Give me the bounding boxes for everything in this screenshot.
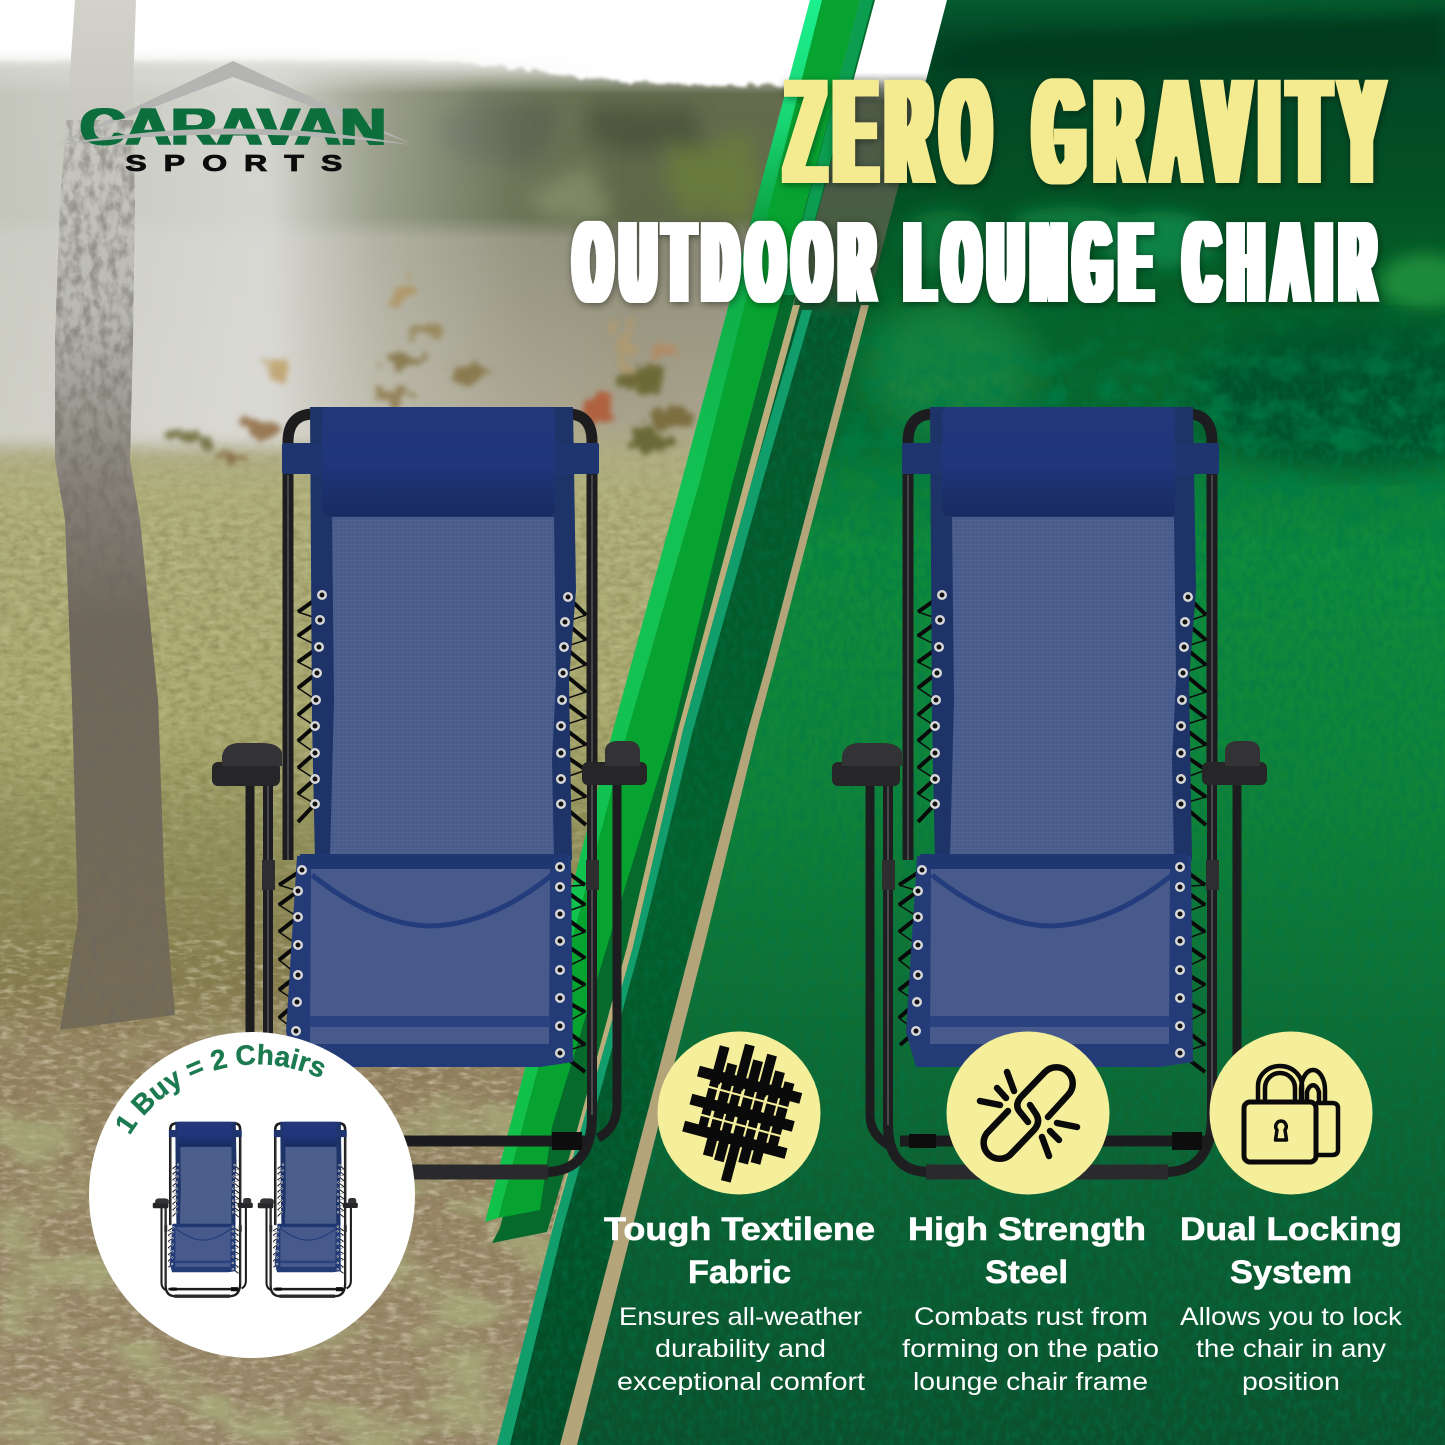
heading: High Strength bbox=[908, 1211, 1146, 1247]
diagonal band: dark green behind bright band bbox=[492, 0, 875, 1243]
logo roof bbox=[57, 61, 412, 144]
description: forming on the patio bbox=[902, 1335, 1159, 1363]
title line 1: ZERO bbox=[787, 47, 1001, 215]
logo sports text: SPORTS bbox=[125, 150, 342, 176]
feature: tough textilene fabric: Fabric bbox=[688, 1254, 791, 1290]
feature: dual locking system: System bbox=[1230, 1254, 1352, 1290]
logo wordmark: CARAVAN bbox=[80, 98, 386, 157]
logo swoosh bbox=[57, 128, 412, 145]
background photo: right green-tinted meadow bbox=[577, 0, 1445, 1445]
bushes and foliage bbox=[165, 280, 694, 462]
diagonal band: teal top accent bbox=[783, 0, 873, 295]
description: exceptional comfort bbox=[617, 1368, 865, 1396]
title line 2: OUTDOOR bbox=[575, 197, 884, 327]
mini chair 2 bbox=[258, 1122, 358, 1296]
badge: 1 Buy = 2 Chairs bbox=[89, 1032, 415, 1358]
chair: left, large bbox=[212, 407, 647, 1172]
tree trunk bbox=[55, 0, 175, 1030]
diagonal band: light green edge bbox=[485, 0, 822, 1222]
diagonal band: dark photo strip bbox=[497, 65, 928, 1445]
mini chair 1 bbox=[153, 1122, 253, 1296]
treeline highlights bbox=[440, 100, 763, 222]
description: Combats rust from bbox=[914, 1303, 1148, 1331]
background photo: left lakeside meadow bbox=[0, 56, 840, 1445]
heading: Dual Locking bbox=[1180, 1211, 1402, 1247]
description: Allows you to lock bbox=[1180, 1303, 1403, 1331]
description: the chair in any bbox=[1196, 1335, 1387, 1363]
feature: tough textilene fabric bbox=[604, 1032, 875, 1396]
diagonal stripe: tan inner bbox=[550, 305, 800, 1235]
title bbox=[575, 47, 1395, 327]
feature: dual locking system bbox=[1180, 1032, 1403, 1396]
description bbox=[1180, 1303, 1403, 1396]
icon: double padlock bbox=[1244, 1066, 1338, 1162]
description: position bbox=[1242, 1368, 1340, 1396]
description: lounge chair frame bbox=[913, 1368, 1148, 1396]
diagonal stripe: teal bbox=[497, 310, 812, 1445]
description: durability and bbox=[655, 1335, 826, 1363]
chair: right, large bbox=[832, 407, 1267, 1172]
badge curved label: 1 Buy = 2 Chairs bbox=[117, 1044, 324, 1134]
description bbox=[617, 1303, 865, 1396]
description: Ensures all-weather bbox=[619, 1303, 862, 1331]
feature: high strength steel bbox=[902, 1032, 1159, 1396]
diagonal stripe: tan outer bbox=[560, 305, 869, 1445]
icon: woven fabric bbox=[673, 1034, 811, 1195]
feature: high strength steel: Steel bbox=[985, 1254, 1068, 1290]
logo: Caravan Sports bbox=[57, 61, 412, 176]
heading: Tough Textilene bbox=[604, 1211, 875, 1247]
diagonal band: bright green bbox=[498, 0, 860, 1218]
icon: broken chain link bbox=[980, 1067, 1077, 1159]
description bbox=[902, 1303, 1159, 1396]
